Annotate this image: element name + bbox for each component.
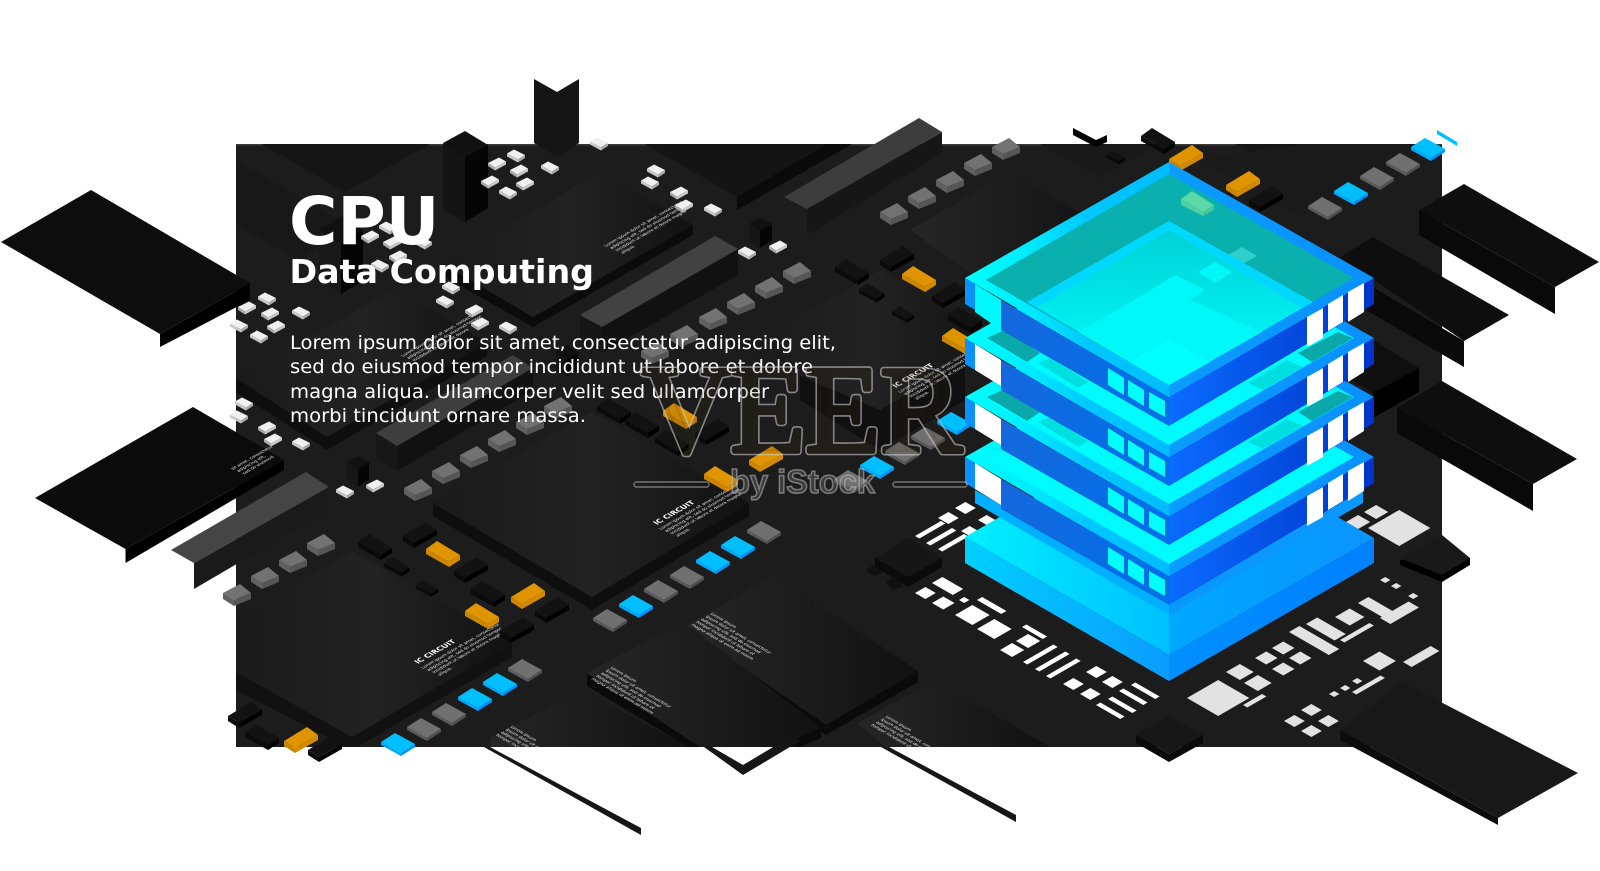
title bbox=[289, 183, 594, 291]
IC CIRCUIT label near tower: aliqua. bbox=[913, 390, 931, 401]
IC chip: bottom left with IC CIRCUIT label: aliqua. bbox=[436, 666, 454, 677]
IC chip: upper: Lorem ipsum dolor sit amet, consectetur bbox=[603, 201, 685, 248]
IC chips: bottom row: adipiscing elit, sed do eiusmod bbox=[599, 671, 663, 709]
IC chips: bottom row: Lorem ipsum bbox=[508, 725, 537, 742]
small tower: center bbox=[556, 345, 578, 376]
IC chips: bottom row: Ipsum dolor sit amet, consectetur bbox=[879, 718, 948, 758]
IC chip: center with IC CIRCUIT label bbox=[433, 412, 754, 610]
CPU tower: layer 3 bbox=[965, 281, 1374, 545]
lead lines below the board bbox=[484, 737, 1016, 835]
outer piece: left lower black panel: adipiscing elit, bbox=[235, 454, 268, 473]
outer piece: left lower black panel: sed do eiusmod bbox=[241, 455, 276, 476]
tower: behind title bbox=[319, 217, 363, 294]
orange capacitors bbox=[284, 145, 1260, 753]
IC chip: bottom left with IC CIRCUIT label: incididunt ut labore et dolore magna bbox=[431, 631, 506, 675]
IC chips: bottom row: tempor incididunt ut labore bbox=[869, 723, 926, 756]
IC chips: bottom row: Ipsum dolor sit amet, consectetur bbox=[504, 728, 573, 768]
description text bbox=[290, 332, 836, 427]
light solder pads right of tower bbox=[1187, 505, 1439, 737]
IC CIRCUIT label near tower bbox=[890, 346, 993, 402]
IC chip: center with IC CIRCUIT label: IC CIRCUIT bbox=[651, 499, 698, 526]
circuit board background bbox=[236, 144, 1442, 747]
IC chips: bottom row: Lorem ipsum bbox=[883, 715, 912, 732]
outer piece: left upper black panel bbox=[1, 190, 250, 347]
IC chips: bottom row: tempor incididunt ut labore et bbox=[594, 674, 656, 710]
CPU tower: top layer bbox=[965, 162, 1374, 426]
IC chips: bottom row: Lorem ipsum bbox=[608, 666, 637, 683]
IC chips: bottom row: adipiscing elit, sed do eiusmod bbox=[499, 730, 563, 768]
description text: sed do eiusmod tempor incididunt ut labore et dolore bbox=[290, 356, 813, 378]
IC chips: bottom row: adipiscing elit, sed do eiusmod bbox=[874, 720, 938, 758]
description text: morbi tincidunt ornare massa. bbox=[290, 405, 586, 427]
gray bar: lower bbox=[376, 355, 533, 471]
gray and cyan chip rows bbox=[223, 138, 1445, 756]
tower: top notch bbox=[534, 79, 579, 157]
IC chip: center with IC CIRCUIT label: adipiscing elit, sed do eiusmod tempor bbox=[663, 488, 742, 533]
watermark: VEER bbox=[642, 342, 962, 478]
IC chips: bottom row bbox=[490, 612, 1050, 747]
IC chip: upper bbox=[443, 171, 699, 327]
white solder pads left of tower bbox=[915, 502, 1160, 719]
white resistors bbox=[230, 138, 787, 498]
small tower: upper bbox=[749, 217, 772, 248]
gray bar: middle bbox=[580, 236, 738, 353]
gray bar: left bbox=[171, 472, 329, 589]
CPU tower base bbox=[965, 420, 1374, 681]
IC chips: bottom row: Ipsum dolor sit amet, consectetur bbox=[604, 669, 673, 709]
IC chip: upper: aliqua. bbox=[619, 244, 637, 255]
title: Data Computing bbox=[290, 252, 594, 291]
gray bar: top bbox=[784, 118, 942, 235]
outer piece: left lower black panel: sit amet, consectetur bbox=[230, 445, 275, 471]
description text: Lorem ipsum dolor sit amet, consectetur adipiscing elit, bbox=[290, 332, 836, 354]
IC chips: bottom row: adipiscing elit, sed do eiusmod bbox=[699, 617, 763, 655]
IC chip: middle left: incididunt ut labore et dolore bbox=[411, 328, 471, 363]
IC chip: middle left: Lorem ipsum dolor sit amet, consectetur bbox=[400, 311, 482, 358]
IC CIRCUIT label near tower: adipiscing elit, sed do eiusmod tempor bbox=[902, 351, 981, 396]
CPU tower: layer 2 bbox=[965, 222, 1374, 486]
outer piece: right panels bbox=[1330, 184, 1599, 511]
IC chip: center with IC CIRCUIT label: aliqua. bbox=[674, 527, 692, 538]
title: CPU bbox=[289, 183, 439, 260]
IC chips: bottom row: Lorem ipsum bbox=[708, 612, 737, 629]
cyan trace top right bbox=[1437, 130, 1457, 146]
dark components bbox=[228, 128, 1283, 762]
watermark: by iStock bbox=[730, 463, 876, 500]
outer piece: left lower black panel bbox=[35, 407, 285, 563]
IC CIRCUIT label near tower: incididunt ut labore et dolore bbox=[908, 364, 968, 399]
CPU tower: layer 4 bbox=[965, 341, 1374, 605]
IC CIRCUIT label near tower: Lorem ipsum dolor sit amet, consectetur bbox=[897, 347, 979, 394]
IC chip: bottom left with IC CIRCUIT label bbox=[236, 623, 512, 747]
IC chip: bottom left with IC CIRCUIT label: IC CIRCUIT bbox=[412, 638, 459, 665]
IC chip: center right bbox=[740, 270, 1000, 450]
watermark bbox=[633, 366, 968, 501]
IC chip: upper: adipiscing elit, sed do eiusmod tempor bbox=[608, 205, 687, 250]
outer piece: right small block bbox=[1400, 535, 1470, 582]
IC chips: bottom row: tempor incididunt ut labore bbox=[494, 733, 551, 766]
IC chip: middle left bbox=[236, 311, 487, 450]
IC chip: upper: incididunt ut labore et dolore magna bbox=[614, 209, 689, 253]
IC chips: bottom row: Ipsum dolor sit amet, consectetur bbox=[704, 615, 773, 655]
IC CIRCUIT label near tower: IC CIRCUIT bbox=[890, 362, 937, 389]
IC chip: middle left: adipiscing elit, sed do eiusmod tempor bbox=[405, 315, 484, 360]
IC chips: bottom row: tempor incididunt ut labore et bbox=[694, 620, 756, 656]
description text: magna aliqua. Ullamcorper velit sed ullamcorper bbox=[290, 381, 769, 403]
IC chip: center with IC CIRCUIT label: incididunt ut labore et dolore magna bbox=[669, 492, 744, 536]
small tower: lower bbox=[347, 456, 369, 487]
CPU tower: bottom lip bbox=[975, 490, 1363, 615]
tower: second bbox=[443, 131, 488, 222]
IC chips: bottom row: magna aliqua ut enim ad minim bbox=[589, 677, 655, 715]
dark socket blocks bbox=[866, 538, 1203, 762]
top dark bracket bbox=[1073, 128, 1107, 147]
IC chip: bottom left with IC CIRCUIT label: Lorem ipsum dolor sit amet, consectetur bbox=[420, 623, 502, 670]
IC chips: bottom row: magna aliqua ut enim ad minim bbox=[689, 623, 755, 661]
IC chip: bottom left with IC CIRCUIT label: adipiscing elit, sed do eiusmod tempor bbox=[425, 627, 504, 672]
outer piece: bottom right panel bbox=[1340, 682, 1578, 825]
IC chip: center with IC CIRCUIT label: Lorem ipsum dolor sit amet, consectetur bbox=[658, 484, 740, 531]
